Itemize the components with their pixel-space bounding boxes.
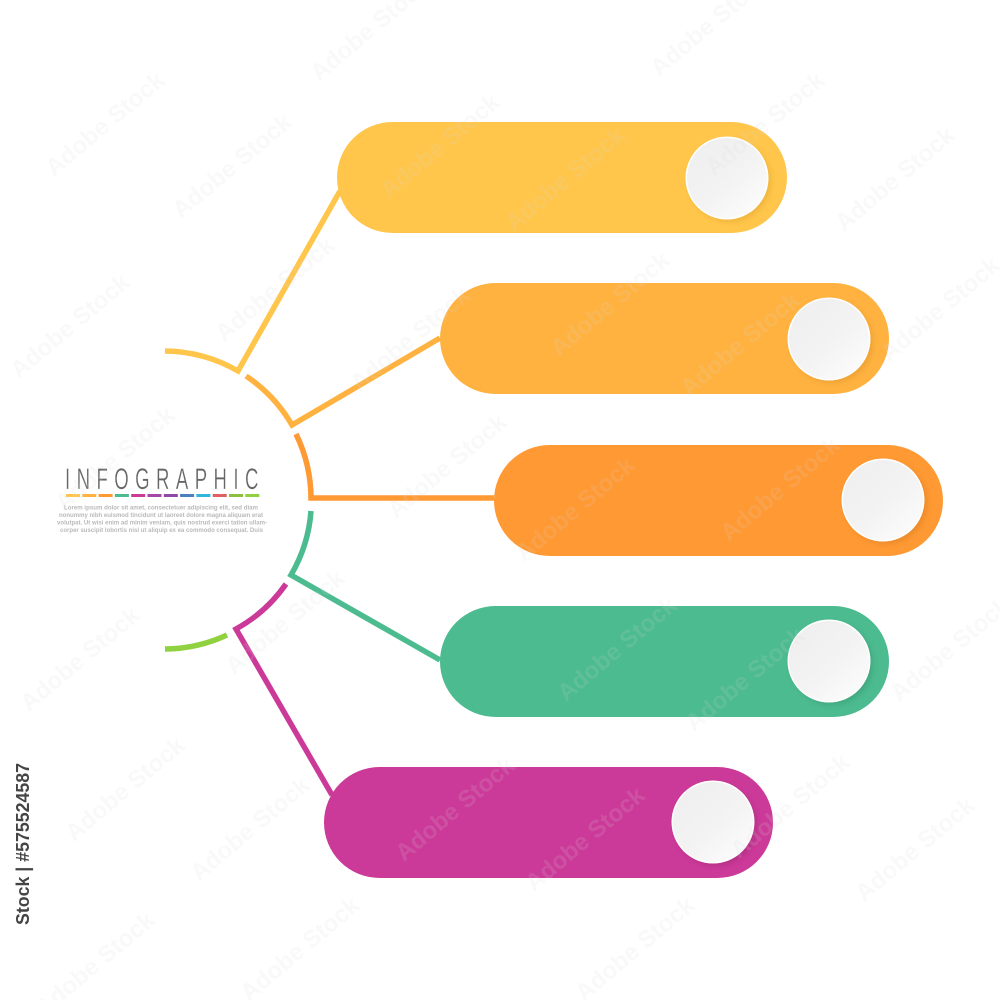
- watermark: Adobe Stock: [345, 281, 476, 397]
- watermark: Adobe Stock: [850, 791, 981, 907]
- disc 4: [788, 620, 873, 705]
- body text: nonummy nibh euismod tincidunt ut laoreet dolore magna aliquam erat: [59, 512, 264, 519]
- body text: [57, 504, 267, 534]
- watermark: Adobe Stock: [15, 601, 146, 717]
- body text: corper suscipit lobortis nisl ut aliquip ex ea commodo consequat. Duis: [60, 527, 263, 534]
- connector: green arc and line: [291, 511, 440, 660]
- watermark: Adobe Stock: [167, 108, 298, 224]
- watermark: Adobe Stock: [185, 771, 316, 887]
- pill 5: magenta: [324, 767, 773, 878]
- body text: Lorem ipsum dolor sit amet, consectetuer adipiscing elit, sed diam: [64, 504, 258, 512]
- title: INFOGRAPHIC: [65, 463, 258, 496]
- pill 3: orange: [494, 445, 943, 556]
- watermark: Adobe Stock: [725, 748, 856, 864]
- watermark: Adobe Stock: [210, 231, 341, 347]
- watermark: Adobe Stock: [375, 88, 506, 204]
- watermark: Adobe Stock: [675, 286, 806, 402]
- pill 4: green: [440, 606, 889, 717]
- body text: volutpat. Ut wisi enim ad minim veniam, quis nostrud exerci tation ullam-: [57, 519, 267, 526]
- connector: magenta arc and line: [236, 584, 332, 795]
- watermark: Adobe Stock: [700, 66, 831, 182]
- watermark: Adobe Stock: [520, 781, 651, 897]
- watermark: Adobe Stock: [60, 731, 191, 847]
- arc: lime: [165, 635, 227, 649]
- disc 2: [788, 298, 873, 383]
- stock id vertical text: Stock | #575524587: [13, 763, 33, 925]
- disc 3: [842, 458, 927, 544]
- pill 2: light orange: [440, 283, 889, 394]
- watermark: Adobe Stock: [500, 121, 631, 237]
- watermark: Adobe Stock: [830, 121, 961, 237]
- disc 5: [672, 780, 757, 866]
- watermark: Adobe Stock: [715, 431, 846, 547]
- connector: orange arc and line: [296, 434, 494, 498]
- connector: yellow arc and line: [165, 191, 340, 371]
- watermark: Adobe Stock: [552, 591, 683, 707]
- watermark: Adobe Stock: [50, 401, 181, 517]
- watermark: Adobe Stock: [390, 751, 521, 867]
- watermark: Adobe Stock: [382, 408, 513, 524]
- connector: light orange arc and line: [246, 338, 440, 425]
- colored dash row: [66, 494, 259, 497]
- watermark: Adobe Stock: [545, 246, 676, 362]
- watermark: Adobe Stock: [680, 621, 811, 737]
- watermark: Adobe Stock: [510, 451, 641, 567]
- watermark: Adobe Stock: [5, 268, 136, 384]
- disc 1: [686, 136, 771, 222]
- watermark: Adobe Stock: [220, 564, 351, 680]
- pill 1: yellow: [337, 122, 787, 233]
- watermark: Adobe Stock: [40, 66, 171, 182]
